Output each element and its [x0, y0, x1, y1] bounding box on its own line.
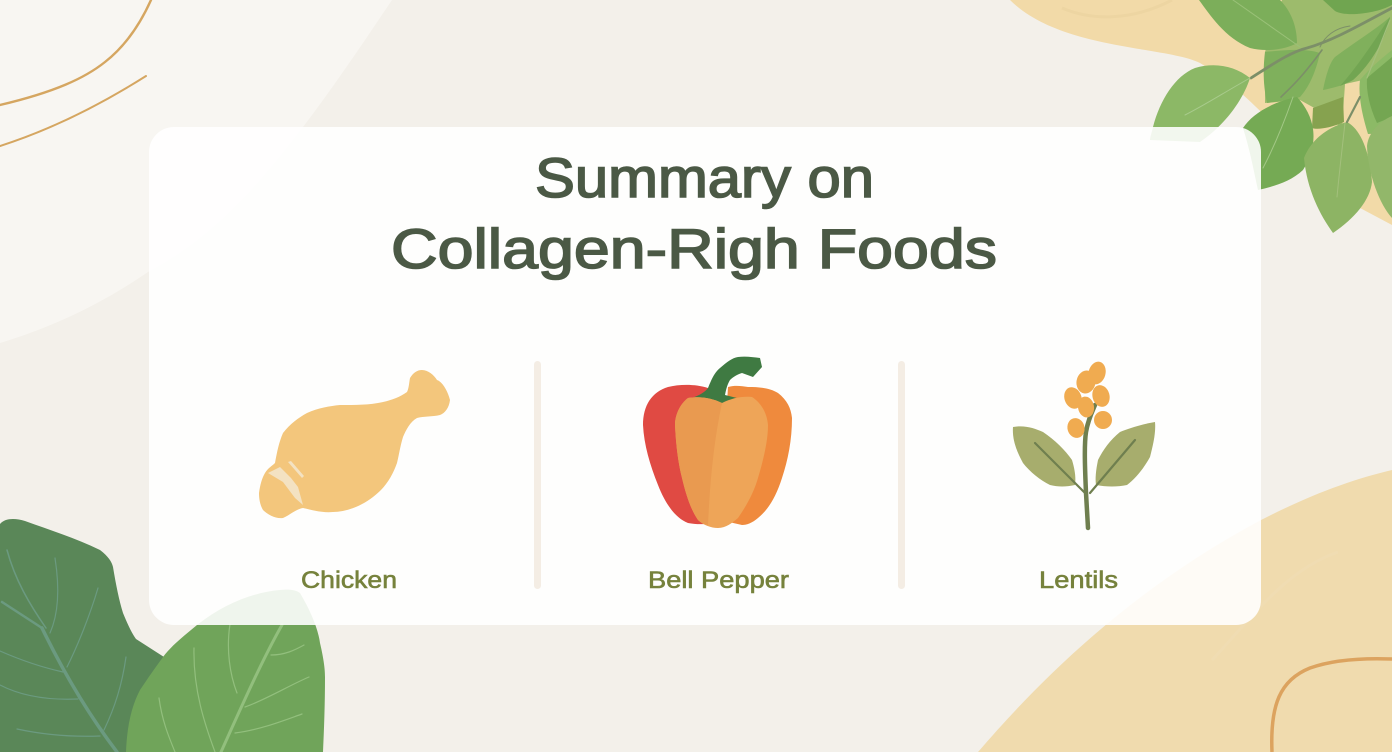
- leaf: light green veins: [159, 624, 309, 752]
- foliage: bottom left: [0, 519, 325, 752]
- background blob: bottom right tan: [978, 470, 1392, 752]
- leaf: upper right shade: [1340, 17, 1390, 86]
- decorative faint stroke: top right: [1062, 0, 1172, 17]
- decorative faint stroke: bottom right: [1212, 552, 1338, 660]
- leaf: behind centre: [1264, 50, 1320, 103]
- pepper right lobe: [720, 386, 792, 525]
- leaf: far right: [1367, 116, 1392, 218]
- leaf: top right dark: [1323, 0, 1392, 14]
- leaf: dark green: [0, 519, 164, 752]
- decorative curve: bottom right line: [1272, 659, 1392, 752]
- leaf: olive under: [1312, 97, 1344, 129]
- leaf: centre: [1243, 97, 1314, 190]
- light green backdrop leaf mass: [1265, 0, 1392, 128]
- title: [391, 146, 997, 280]
- leaf: far right light: [1359, 50, 1392, 134]
- leaf: upper right: [1323, 17, 1390, 90]
- title line 2: Collagen-Righ Foods: [391, 217, 997, 280]
- plant left leaf: [1013, 426, 1075, 486]
- foliage: top right: [1150, 0, 1392, 233]
- plant right leaf: [1096, 422, 1155, 486]
- pepper stem: [692, 357, 762, 405]
- icon: bell pepper: [643, 357, 792, 528]
- plant stems: [1035, 405, 1135, 528]
- label: Lentils: Lentils: [1039, 567, 1118, 594]
- leaf: dark green veins: [0, 550, 126, 752]
- leaf: lower middle: [1304, 122, 1372, 233]
- divider: right: [898, 361, 905, 589]
- divider: left: [534, 361, 541, 589]
- icon: chicken drumstick: [259, 370, 450, 518]
- pepper front: [675, 397, 768, 528]
- icon: lentil plant: [1013, 360, 1155, 528]
- title line 1: Summary on: [535, 146, 874, 209]
- leaf: left: [1150, 65, 1250, 142]
- background light blob: top left: [0, 0, 392, 343]
- decorative curve: top left lines: [0, 0, 151, 146]
- lentil seeds: [1061, 360, 1112, 440]
- pepper front shade: [675, 397, 722, 525]
- pepper left lobe: [643, 385, 725, 524]
- label: Bell Pepper: Bell Pepper: [648, 567, 789, 594]
- leaf: far right dark: [1367, 57, 1392, 123]
- branch and stems: [1185, 0, 1392, 197]
- leaf: light green: [126, 590, 325, 752]
- background blob: top right tan: [1010, 0, 1392, 225]
- panel: main card: [149, 127, 1261, 625]
- label: Chicken: Chicken: [301, 567, 397, 594]
- leaf: top: [1199, 0, 1297, 50]
